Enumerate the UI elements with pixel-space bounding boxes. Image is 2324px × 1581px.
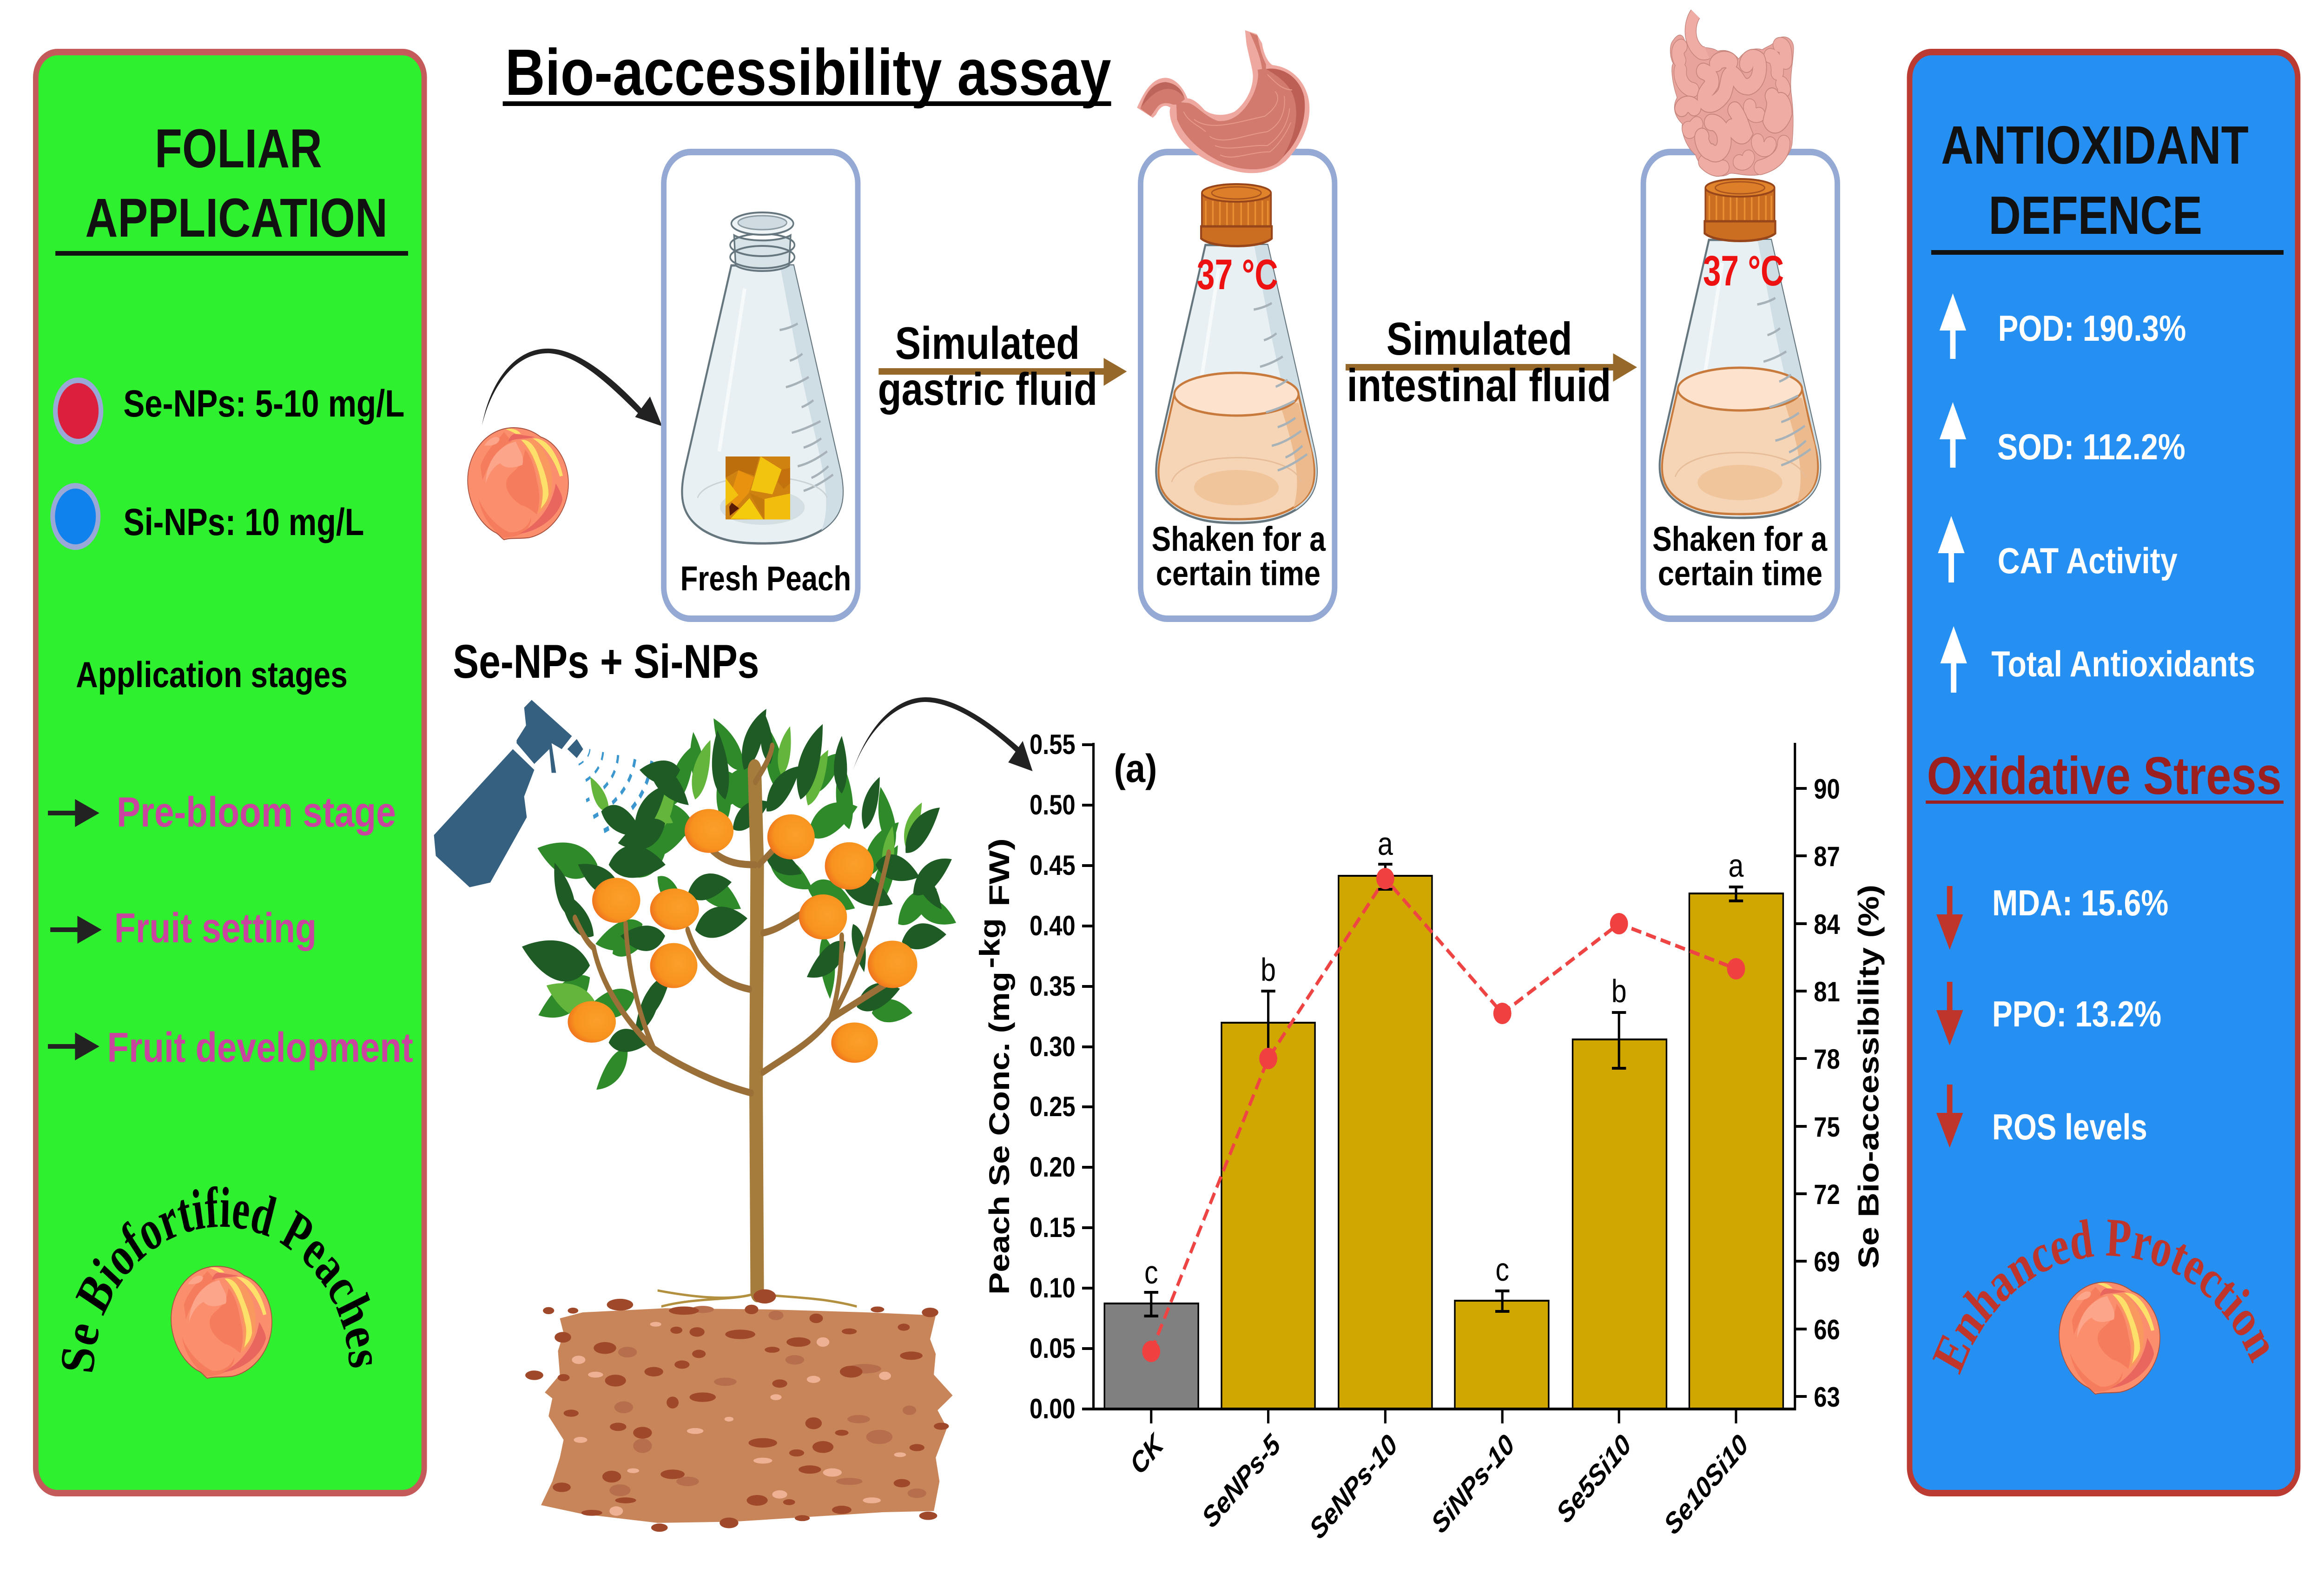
left axis title xyxy=(975,838,1016,1295)
axes xyxy=(1082,743,1807,1423)
label: Se-NPs + Si-NPs: Se-NPs + Si-NPs xyxy=(453,635,759,688)
label: simulated gastric fluid: Simulated xyxy=(895,318,1080,369)
icon: fresh peach xyxy=(468,428,568,540)
label: shaken: certain time xyxy=(1658,554,1822,593)
image: peach cubes xyxy=(726,456,790,519)
curved text: Se Biofortified Peaches: Se Biofortified Peaches xyxy=(50,1176,393,1376)
left axis title: Peach Se Conc. (mg xyxy=(984,972,1016,1295)
left axis tick labels: 0.05 xyxy=(1030,1333,1076,1364)
illustration: soil xyxy=(525,1289,953,1532)
arrow: simulated gastric fluid xyxy=(878,358,1127,386)
left axis tick labels: 0.35 xyxy=(1030,971,1076,1002)
right axis tick labels: 75 xyxy=(1814,1111,1840,1143)
panel: intestinal flask xyxy=(1644,152,1837,619)
icon: small intestine xyxy=(1670,14,1794,176)
icon: blue Si-NPs dot xyxy=(53,486,98,547)
label: shaken xyxy=(1152,520,1326,593)
icon: spray bottle xyxy=(434,700,652,887)
right axis tick labels: 78 xyxy=(1814,1044,1840,1075)
label: shaken: certain time xyxy=(1156,554,1320,593)
category labels: Se10Si10 xyxy=(1659,1429,1754,1541)
left axis tick labels: 0.55 xyxy=(1030,729,1076,760)
antioxidant values xyxy=(1991,309,2255,684)
right axis title: Se Bio-accessibility (%) xyxy=(1852,885,1885,1269)
flask: empty glass xyxy=(682,212,843,543)
bars xyxy=(1104,876,1783,1409)
tree trunk and branches xyxy=(575,746,889,1292)
oxidative stress values xyxy=(1992,883,2168,1147)
category labels xyxy=(1125,1427,1754,1545)
significance letters xyxy=(1144,825,1744,1290)
illustration: peach tree xyxy=(519,701,958,1306)
heading: antioxidant defence xyxy=(1931,115,2284,255)
arrow: simulated intestinal fluid xyxy=(1346,353,1637,382)
label: simulated gastric fluid: gastric fluid xyxy=(878,364,1097,415)
significance letters: b xyxy=(1261,951,1276,988)
leaves: light xyxy=(543,723,926,1025)
soil stones: dark xyxy=(525,1289,949,1532)
left axis tick labels: 0.45 xyxy=(1030,850,1076,881)
heading: antioxidant defence: DEFENCE xyxy=(1988,185,2202,245)
significance letters: a xyxy=(1378,825,1393,862)
heading: oxidative stress: Oxidative Stress xyxy=(1927,746,2282,806)
arrow: pre-bloom xyxy=(48,799,99,827)
significance letters: c xyxy=(1144,1254,1158,1290)
oxidative stress values: MDA: 15.6% xyxy=(1992,883,2168,923)
right axis tick labels: 72 xyxy=(1814,1179,1840,1210)
right axis tick labels: 69 xyxy=(1814,1246,1840,1277)
label: Se-NPs dose: Se-NPs: 5-10 mg/L xyxy=(123,383,404,425)
icon: peach xyxy=(2059,1282,2160,1394)
right axis tick labels: 87 xyxy=(1814,841,1840,872)
data points xyxy=(1142,868,1745,1362)
title: Bio-accessibility assay xyxy=(505,36,1111,109)
category labels: Se5Si10 xyxy=(1552,1429,1637,1529)
significance letters: c xyxy=(1495,1251,1509,1288)
bio-accessibility line xyxy=(1151,879,1736,1351)
icon: peach xyxy=(171,1266,272,1378)
right axis tick labels: 63 xyxy=(1814,1382,1840,1413)
oxidative stress values: PPO: 13.2% xyxy=(1992,994,2161,1034)
stage: pre-bloom: Pre-bloom stage xyxy=(117,788,396,835)
label: Fresh Peach: Fresh Peach xyxy=(680,559,851,598)
arrow: peach to flask xyxy=(482,349,662,426)
label: shaken xyxy=(1652,520,1828,593)
flask: intestinal digestion xyxy=(1660,179,1820,518)
antioxidant values: SOD: 112.2% xyxy=(1997,427,2185,467)
heading: antioxidant defence: ANTIOXIDANT xyxy=(1941,115,2249,175)
category labels: CK xyxy=(1125,1427,1170,1481)
panel: foliar application xyxy=(36,52,424,1493)
label: simulated intestinal fluid: Simulated xyxy=(1386,313,1572,365)
arrows: increases xyxy=(1938,293,1967,693)
significance letters: b xyxy=(1611,972,1627,1009)
antioxidant values: POD: 190.3% xyxy=(1998,309,2186,349)
category labels: SiNPs-10 xyxy=(1426,1429,1520,1540)
left axis tick labels xyxy=(1030,729,1076,1424)
left axis tick labels: 0.10 xyxy=(1030,1272,1076,1303)
category labels: SeNPs-10 xyxy=(1304,1429,1403,1545)
label: application stages: Application stages xyxy=(76,655,348,695)
heading: foliar application: FOLIAR xyxy=(155,118,322,179)
arrow: tree to chart xyxy=(853,697,1033,771)
oxidative stress values: ROS levels xyxy=(1992,1107,2147,1147)
leaves: front dark xyxy=(519,701,955,1052)
soil stones: light xyxy=(572,1322,906,1516)
heading: foliar application: APPLICATION xyxy=(85,187,388,249)
stage: fruit setting: Fruit setting xyxy=(114,905,317,951)
arrow: fruit development xyxy=(48,1032,99,1060)
panel letter: (a) xyxy=(1114,747,1157,790)
label: simulated intestinal fluid: intestinal fluid xyxy=(1347,360,1611,411)
stage: fruit development: Fruit development xyxy=(107,1024,413,1071)
soil stones: medium xyxy=(609,1306,926,1498)
label: 37 C: 37 °C xyxy=(1703,247,1784,295)
left axis tick labels: 0.40 xyxy=(1030,910,1076,941)
left axis tick labels: 0.00 xyxy=(1030,1393,1076,1424)
label: shaken: Shaken for a xyxy=(1152,520,1326,558)
label: simulated intestinal fluid xyxy=(1347,313,1611,411)
flask: gastric digestion xyxy=(1156,184,1317,523)
antioxidant values: CAT Activity xyxy=(1998,541,2178,581)
panel: fresh peach flask xyxy=(664,152,858,619)
left axis title: FW) xyxy=(984,838,1016,906)
significance letters: a xyxy=(1729,847,1744,884)
left axis tick labels: 0.15 xyxy=(1030,1212,1076,1243)
left axis tick labels: 0.30 xyxy=(1030,1031,1076,1062)
leaves: back layer xyxy=(535,711,958,1100)
right axis tick labels: 81 xyxy=(1814,976,1840,1007)
right axis tick labels xyxy=(1814,774,1840,1413)
peach fruits xyxy=(568,809,918,1063)
right axis tick labels: 66 xyxy=(1814,1314,1840,1345)
error bars xyxy=(1144,864,1743,1316)
heading: foliar application xyxy=(55,118,408,256)
icon: stomach xyxy=(1137,30,1309,173)
panel: antioxidant defence xyxy=(1910,52,2298,1493)
label: 37 C: 37 °C xyxy=(1197,251,1278,299)
left axis tick labels: 0.50 xyxy=(1030,789,1076,820)
label: shaken: Shaken for a xyxy=(1652,520,1828,558)
left axis tick labels: 0.20 xyxy=(1030,1151,1076,1183)
category labels: SeNPs-5 xyxy=(1197,1428,1286,1534)
icon: red Se-NPs dot xyxy=(55,380,101,442)
left axis tick labels: 0.25 xyxy=(1030,1091,1076,1122)
antioxidant values: Total Antioxidants xyxy=(1991,644,2255,684)
tree roots xyxy=(658,1290,857,1306)
right axis tick labels: 84 xyxy=(1814,909,1840,940)
label: Si-NPs dose: Si-NPs: 10 mg/L xyxy=(123,501,364,543)
arrows: decreases xyxy=(1936,886,1963,1148)
panel: gastric flask xyxy=(1141,152,1334,619)
curved text: Enhanced Protection: Enhanced Protection xyxy=(1922,1207,2289,1381)
right axis tick labels: 90 xyxy=(1814,774,1840,805)
bar chart (a) xyxy=(975,729,1885,1545)
arrow: fruit setting xyxy=(50,916,102,944)
label: simulated gastric fluid xyxy=(878,318,1097,415)
left axis title: -kg xyxy=(975,918,1006,968)
